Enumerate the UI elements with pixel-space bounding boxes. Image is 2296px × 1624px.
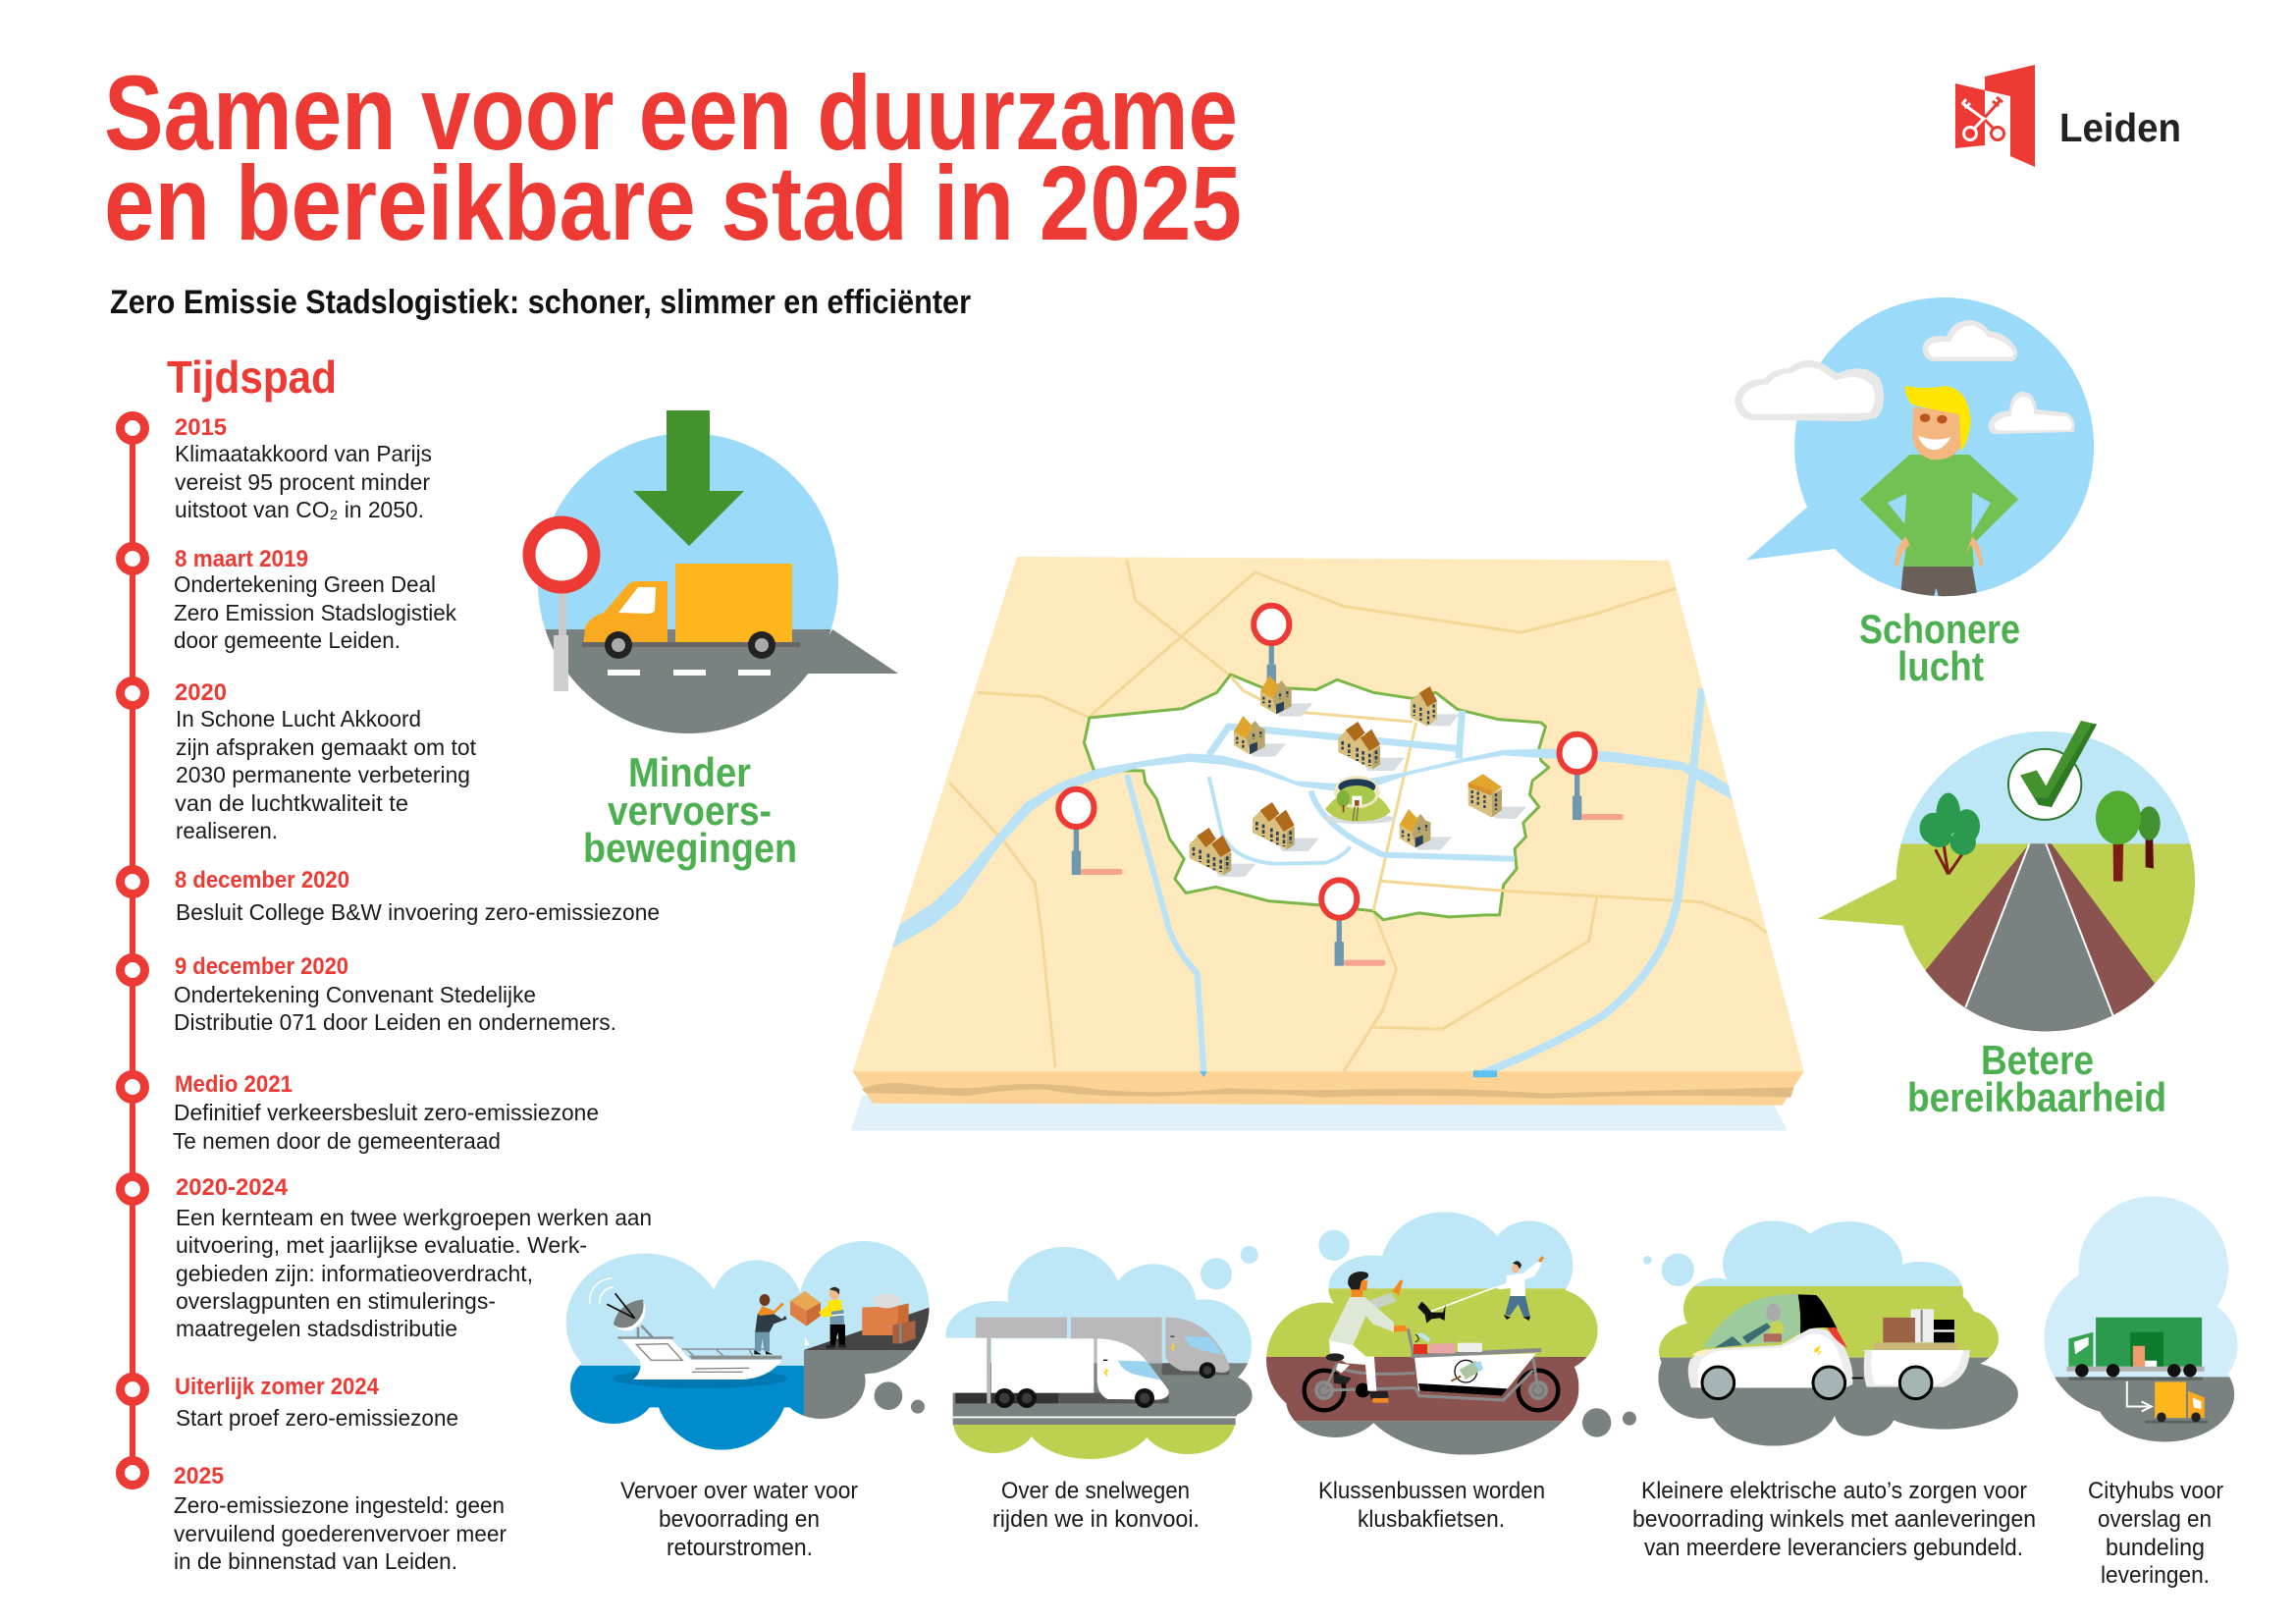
caption: cargo bikes: klusbakfietsen. (1358, 1506, 1505, 1533)
icon: trailer with goods (1852, 1309, 1970, 1399)
caption: water: Vervoer over water voor (620, 1478, 858, 1504)
speech bubble tail (1817, 878, 1906, 926)
icon: rider (1326, 1272, 1408, 1403)
caption: electric cars: bevoorrading winkels met aanleveringen (1632, 1506, 2036, 1533)
timeline item: 2020: van de luchtkwaliteit te (175, 790, 408, 816)
map side (853, 1071, 1804, 1106)
caption: electric cars (1632, 1478, 2036, 1561)
bubbles (875, 1381, 925, 1414)
timeline item: 8 maart 2019: 8 maart 2019 (175, 546, 308, 572)
city centre outline (1084, 675, 1549, 920)
timeline heading: Tijdspad (167, 352, 337, 403)
label: minder vervoersbewegingen: vervoers- (608, 787, 772, 834)
caption: cargo bikes: Klussenbussen worden (1318, 1478, 1545, 1504)
caption: city hubs: Cityhubs voor (2088, 1478, 2223, 1504)
title: Samen voor een duurzame (104, 53, 1238, 172)
timeline item: 8 december 2020: Besluit College B&W invoering zero-emissiezone (176, 899, 660, 925)
icon: check mark (2008, 721, 2097, 820)
timeline item: 2020-2024: maatregelen stadsdistributie (176, 1316, 457, 1341)
subtitle: Zero Emissie Stadslogistiek: schoner, slimmer en efficiënter (110, 284, 971, 321)
timeline item: 2020-2024: overslagpunten en stimulerings- (176, 1288, 496, 1314)
timeline item: Medio 2021: Definitief verkeersbesluit zero-emissiezone (174, 1100, 599, 1125)
pin: north (1254, 606, 1289, 682)
panel: betere bereikbaarheid illustration (1817, 721, 2201, 1044)
rivers (890, 688, 1738, 1073)
caption: water: bevoorrading en (659, 1506, 820, 1533)
timeline item: 2025: vervuilend goederenvervoer meer (174, 1521, 507, 1546)
caption: convoy: Over de snelwegen (1001, 1478, 1190, 1504)
timeline item: 2025 (174, 1463, 507, 1574)
timeline item: 8 maart 2019: door gemeente Leiden. (174, 627, 400, 653)
timeline item: 2015: uitstoot van CO₂ in 2050. (175, 497, 424, 522)
panel: map of Leiden (851, 557, 1804, 1130)
timeline item: 2020-2024: uitvoering, met jaarlijkse evaluatie. Werk- (176, 1232, 587, 1258)
icon: people handing over box (754, 1287, 846, 1354)
panel: convoy on motorway (942, 1237, 1258, 1461)
icon: cargo bike (1305, 1328, 1558, 1410)
bubbles (1201, 1246, 1258, 1289)
label: schonere lucht: Schonere (1859, 606, 2020, 652)
panel: cargo bikes (1261, 1203, 1636, 1460)
caption: water (620, 1478, 858, 1561)
icon: green down arrow (633, 410, 744, 546)
title: en bereikbare stad in 2025 (104, 143, 1242, 262)
timeline item: 8 maart 2019: Ondertekening Green Deal (174, 571, 436, 597)
label: minder vervoersbewegingen (583, 749, 797, 871)
icon: front truck (955, 1338, 1176, 1408)
panel: schonere lucht illustration (1735, 298, 2094, 598)
timeline item: 9 december 2020: Ondertekening Convenant Stedelijke (174, 982, 536, 1007)
caption: city hubs: bundeling (2106, 1535, 2205, 1561)
label: minder vervoersbewegingen: bewegingen (583, 825, 797, 871)
timeline item: 2015 (175, 414, 432, 522)
cloud: top (1922, 320, 2017, 361)
timeline item: 2020: zijn afspraken gemaakt om tot (176, 734, 477, 760)
cloud: right (1988, 392, 2075, 434)
icon: tree left (1919, 793, 1980, 874)
pin: south (1321, 880, 1385, 966)
timeline item: Uiterlijk zomer 2024: Uiterlijk zomer 2024 (175, 1374, 380, 1400)
caption: convoy (992, 1478, 1200, 1533)
timeline item: Uiterlijk zomer 2024: Start proef zero-emissiezone (176, 1405, 458, 1431)
timeline item: 9 december 2020: Distributie 071 door Leiden en ondernemers. (174, 1009, 616, 1035)
icon: small orange truck (2145, 1381, 2208, 1423)
timeline item: 2020 (175, 679, 477, 843)
timeline item: 8 maart 2019 (174, 546, 456, 653)
timeline item: 2020: 2030 permanente verbetering (176, 762, 470, 787)
label: betere bereikbaarheid (1907, 1037, 2166, 1120)
timeline item: 8 december 2020: 8 december 2020 (175, 867, 349, 893)
castle (burcht) (1323, 776, 1396, 824)
timeline item: 2025: Zero-emissiezone ingesteld: geen (174, 1492, 505, 1518)
timeline item: 8 december 2020 (175, 867, 660, 925)
title (104, 53, 1242, 262)
caption: city hubs: leveringen. (2101, 1562, 2210, 1589)
cloud: left (1735, 360, 1884, 421)
label: schonere lucht (1859, 606, 2020, 689)
icon: zero-emission sign (529, 522, 594, 691)
label: minder vervoersbewegingen: Minder (628, 749, 751, 795)
caption: water: retourstromen. (667, 1535, 813, 1561)
caption: city hubs: overslag en (2098, 1506, 2212, 1533)
caption: convoy: rijden we in konvooi. (992, 1506, 1200, 1533)
timeline item: 2020-2024 (176, 1174, 652, 1341)
icon: trees right (2096, 790, 2161, 882)
panel: minder vervoersbewegingen illustration (529, 410, 898, 747)
icon: cargo on quay (862, 1294, 916, 1343)
timeline item: 2020-2024: Een kernteam en twee werkgroepen werken aan (176, 1205, 652, 1230)
timeline line and markers (120, 416, 145, 1485)
timeline item: 9 december 2020: 9 december 2020 (175, 953, 348, 980)
timeline item: 2025: in de binnenstad van Leiden. (174, 1548, 457, 1574)
caption: city hubs (2088, 1478, 2223, 1589)
caption: electric cars: Kleinere elektrische auto’s zorgen voor (1641, 1478, 2027, 1504)
label: betere bereikbaarheid: bereikbaarheid (1907, 1074, 2166, 1120)
timeline item: 9 december 2020 (174, 953, 616, 1035)
timeline item: Medio 2021: Te nemen door de gemeenteraad (173, 1128, 501, 1154)
bubbles (1318, 1230, 1636, 1437)
icon: delivery truck (582, 564, 800, 659)
icon: transfer arrow (2127, 1381, 2152, 1411)
caption: cargo bikes (1318, 1478, 1545, 1533)
logo: Leiden: Leiden (2059, 105, 2181, 150)
icon: electric car (1688, 1294, 1853, 1399)
caption: electric cars: van meerdere leveranciers gebundeld. (1644, 1535, 2023, 1561)
roads (949, 561, 1766, 1071)
logo: Leiden (1955, 65, 2181, 167)
houses (1190, 676, 1526, 877)
map base reflection (851, 1096, 1788, 1130)
panel: transport over water (562, 1237, 934, 1464)
panel: city hubs (2044, 1196, 2238, 1441)
panel: small electric cars (1643, 1208, 2025, 1452)
pin: east (1560, 734, 1624, 820)
icon: green truck (2066, 1318, 2205, 1377)
timeline item: 2020: In Schone Lucht Akkoord (176, 706, 421, 731)
timeline item: 2020-2024: gebieden zijn: informatieoverdracht, (176, 1261, 533, 1286)
icon: boat (590, 1278, 782, 1380)
timeline item: 2015: vereist 95 procent minder (175, 469, 430, 495)
timeline item: 8 maart 2019: Zero Emission Stadslogistiek (174, 600, 456, 625)
icon: walker with dog (1417, 1256, 1544, 1324)
map surface (853, 557, 1804, 1071)
timeline item: 2025: 2025 (174, 1463, 224, 1489)
label: schonere lucht: lucht (1897, 643, 1984, 689)
timeline item: Uiterlijk zomer 2024 (175, 1374, 458, 1431)
timeline item: Medio 2021: Medio 2021 (175, 1071, 293, 1098)
timeline item: 2020: 2020 (175, 679, 227, 706)
person (1860, 386, 2018, 598)
timeline item: 2015: Klimaatakkoord van Parijs (175, 441, 432, 466)
timeline item: Medio 2021 (173, 1071, 599, 1154)
speech bubble tail (1746, 463, 1840, 560)
pin: west (1058, 789, 1122, 875)
label: betere bereikbaarheid: Betere (1981, 1037, 2094, 1083)
icon: rear truck (976, 1318, 1230, 1379)
bubbles (1643, 1254, 1694, 1286)
timeline item: 2020-2024: 2020-2024 (176, 1174, 289, 1201)
timeline item: 2015: 2015 (175, 414, 227, 441)
timeline item: 2020: realiseren. (176, 818, 278, 843)
